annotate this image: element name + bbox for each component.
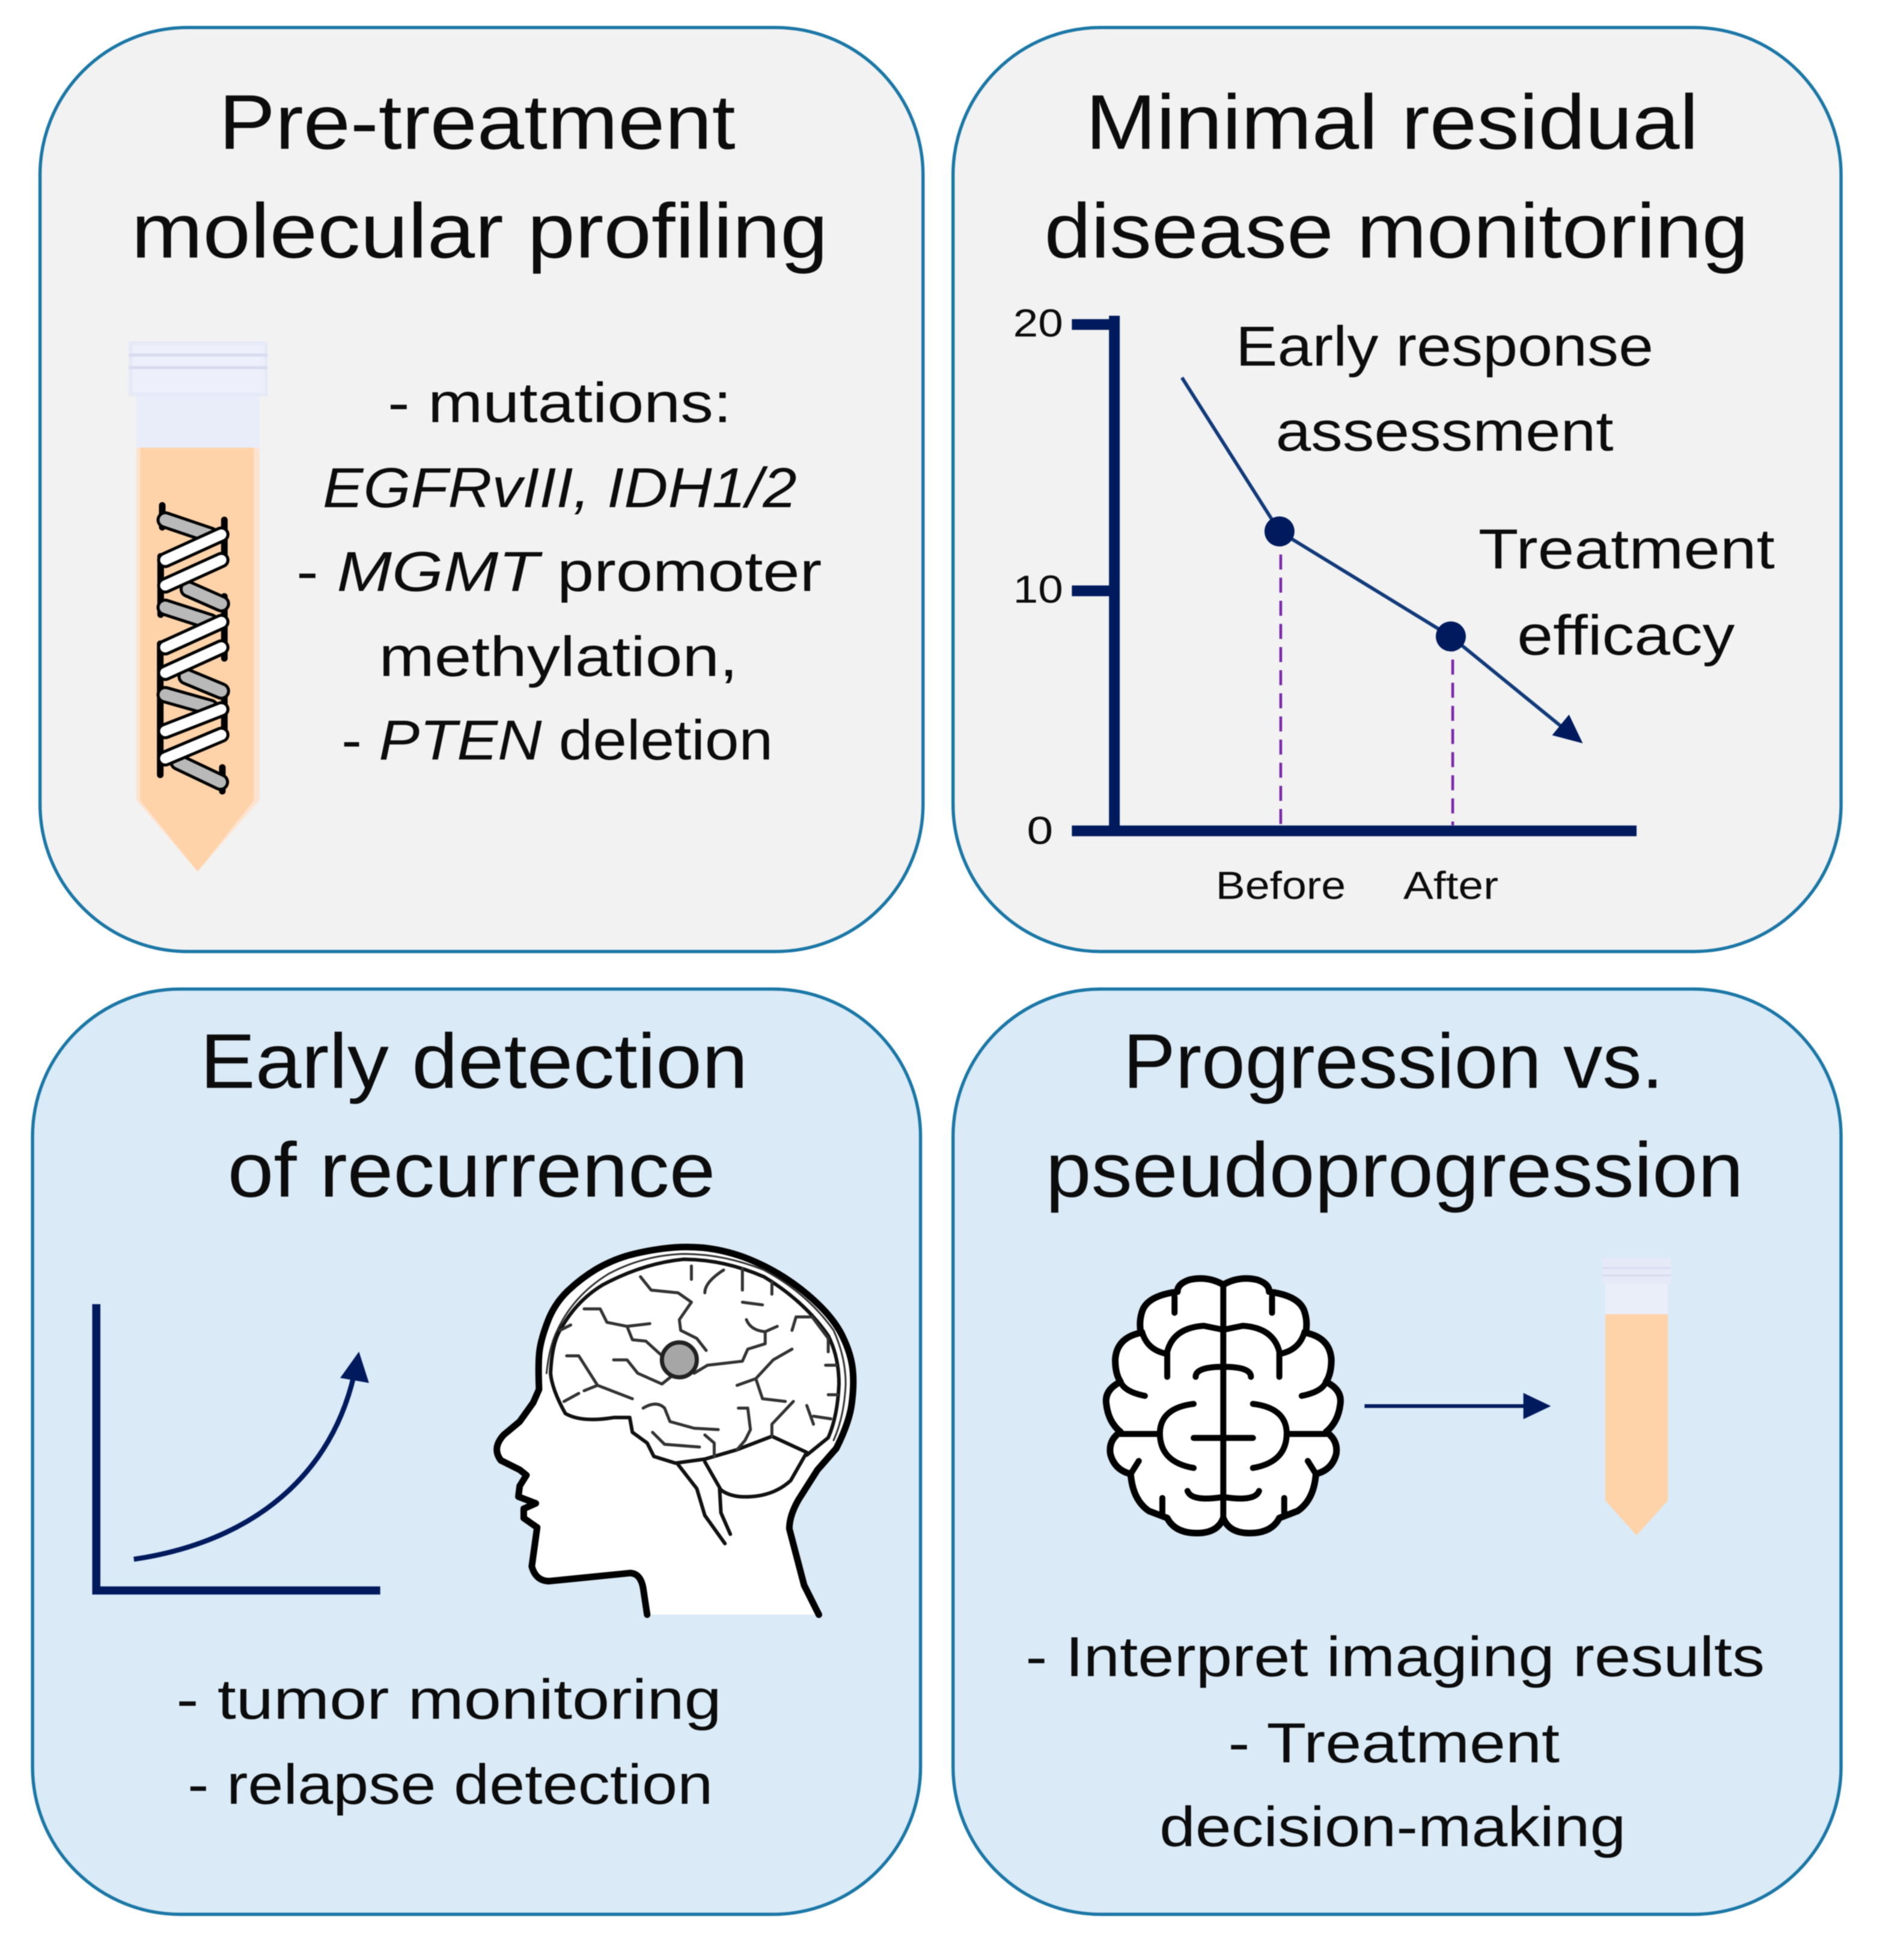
label: early response assessment: assessment: [1276, 400, 1613, 463]
text block: biomarkers list: - mutations:: [388, 371, 731, 434]
text block: biomarkers list: EGFRvIII, IDH1/2: [323, 456, 797, 519]
icon: DNA helix: [160, 505, 224, 791]
axis labels: 20: [1013, 302, 1063, 345]
label: treatment efficacy: Treatment: [1479, 517, 1775, 580]
heading: minimal residual disease monitoring: Minimal residual: [1085, 79, 1698, 166]
trend line with arrow: [1182, 377, 1583, 743]
heading: progression vs pseudoprogression: [1046, 1018, 1744, 1214]
text block: biomarkers list: - MGMT promoter: [296, 540, 822, 603]
icon: head profile with brain and tumor: [497, 1247, 853, 1615]
dashed markers: [1281, 531, 1453, 825]
text block: monitoring bullets: [176, 1667, 722, 1816]
chart: rising curve: [96, 1304, 380, 1590]
arrow: [1364, 1393, 1551, 1419]
panel: pre-treatment molecular profiling: [40, 28, 923, 952]
panel: early detection of recurrence: [32, 989, 921, 1914]
label: treatment efficacy: efficacy: [1517, 603, 1735, 666]
heading: pre-treatment molecular profiling: molecular profiling: [132, 188, 828, 275]
heading: early detection of recurrence: of recurrence: [228, 1127, 715, 1214]
panel: progression vs pseudoprogression: [953, 989, 1841, 1914]
icon: brain top view: [1106, 1279, 1340, 1533]
label: early response assessment: [1236, 315, 1653, 463]
heading: early detection of recurrence: Early detection: [200, 1018, 748, 1104]
text block: clinical uses: [1025, 1625, 1765, 1858]
heading: progression vs pseudoprogression: pseudoprogression: [1046, 1127, 1744, 1214]
chart: response line chart: [1013, 302, 1637, 907]
text block: biomarkers list: methylation,: [379, 625, 738, 688]
axis labels: 0: [1027, 809, 1053, 853]
axes: [1072, 315, 1637, 831]
panel: minimal residual disease monitoring: [953, 28, 1841, 952]
icon: sample tube: [1602, 1258, 1671, 1535]
text block: monitoring bullets: - relapse detection: [188, 1753, 713, 1816]
label: early response assessment: Early response: [1236, 315, 1653, 378]
heading: pre-treatment molecular profiling: Pre-treatment: [219, 79, 736, 166]
heading: minimal residual disease monitoring: disease monitoring: [1045, 188, 1748, 275]
heading: progression vs pseudoprogression: Progression vs.: [1123, 1018, 1664, 1104]
heading: pre-treatment molecular profiling: [132, 79, 828, 275]
text block: monitoring bullets: - tumor monitoring: [176, 1667, 722, 1730]
text block: biomarkers list: [296, 371, 822, 772]
heading: early detection of recurrence: [200, 1018, 748, 1214]
text block: clinical uses: decision-making: [1159, 1795, 1626, 1858]
label: treatment efficacy: [1479, 517, 1775, 666]
icon: sample tube with DNA: [129, 341, 267, 871]
text block: clinical uses: - Interpret imaging results: [1025, 1625, 1765, 1688]
text block: clinical uses: - Treatment: [1228, 1711, 1560, 1774]
axis labels: [1013, 302, 1498, 907]
text block: biomarkers list: - PTEN deletion: [341, 708, 773, 772]
axis labels: 10: [1013, 568, 1063, 611]
heading: minimal residual disease monitoring: [1045, 79, 1748, 275]
axis labels: After: [1403, 864, 1498, 907]
axis labels: Before: [1216, 864, 1346, 907]
